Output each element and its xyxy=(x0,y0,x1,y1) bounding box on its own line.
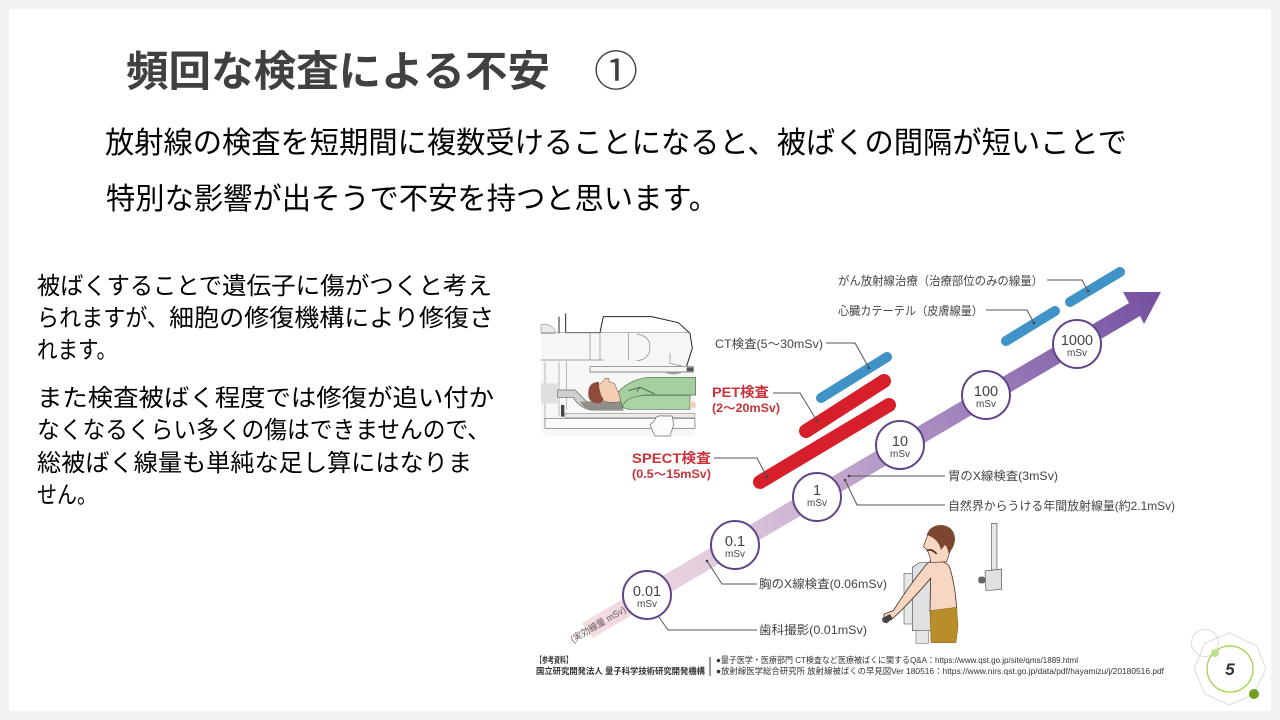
dose marker labels: 10 xyxy=(892,434,908,450)
body text block: また検査被ばく程度では修復が追い付か xyxy=(37,385,494,412)
body text block: れます。 xyxy=(37,337,117,364)
exam labels xyxy=(715,273,1175,637)
body text block: 被ばくすることで xyxy=(37,273,222,300)
dose marker labels: mSv xyxy=(1067,348,1087,359)
reference divider xyxy=(709,657,711,676)
exam labels: CT検査(5〜30mSv) xyxy=(715,337,823,351)
bar: cardiac catheter xyxy=(1006,311,1055,341)
axis label: (実効線量 mSv) xyxy=(568,604,628,646)
red exam labels xyxy=(632,384,780,481)
body text block: なくなるくらい多くの傷はできませんので、 xyxy=(37,417,490,444)
red exam labels: (2〜20mSv) xyxy=(712,403,780,415)
dose bars xyxy=(760,272,1120,482)
dose marker labels xyxy=(633,333,1093,610)
title: 頻回な検査による不安 xyxy=(126,48,550,95)
bar: cancer radiotherapy xyxy=(1070,272,1120,302)
intro text: 特別な影響が出そうで不安を持つと思います。 xyxy=(106,183,718,216)
red exam labels: (0.5〜15mSv) xyxy=(632,469,711,481)
intro text: 放射線の検査を短期間に複数受けることになると、被ばくの間隔が短いことで xyxy=(105,127,1127,160)
exam labels: 胃のX線検査(3mSv) xyxy=(948,468,1058,483)
bar: SPECT xyxy=(760,405,889,482)
reference 1: ●量子医学・医療部門 CT検査など医療被ばくに関するQ&A：https://www.qst.go.jp/site/qms/1889.html xyxy=(716,655,1078,665)
reference 2: ●放射線医学総合研究所 放射線被ばくの早見図Ver 180516：https://www.nirs.qst.go.jp/data/pdf/hayamizu/j/20180516.pdf xyxy=(716,666,1165,676)
exam labels: がん放射線治療（治療部位のみの線量） xyxy=(838,273,1043,288)
dose marker labels: 1 xyxy=(813,483,821,499)
leader lines xyxy=(659,280,1088,630)
exam labels: 胸のX線検査(0.06mSv) xyxy=(759,576,887,591)
exam labels: 自然界からうける年間放射線量(約2.1mSv) xyxy=(948,498,1175,513)
dose marker labels: 1000 xyxy=(1061,333,1093,349)
illustration: man having chest x-ray xyxy=(882,523,1002,643)
red exam labels: SPECT検査 xyxy=(632,450,711,466)
references xyxy=(536,655,1165,676)
body text block xyxy=(37,273,494,509)
dose marker labels: mSv xyxy=(637,599,657,610)
references heading: 【参考資料】 xyxy=(536,655,572,665)
dose markers xyxy=(623,320,1101,619)
leader dots xyxy=(706,290,1089,562)
exam labels: 心臓カテーテル（皮膚線量） xyxy=(838,303,983,318)
dose marker labels: mSv xyxy=(725,549,745,560)
title: ① xyxy=(594,48,638,95)
dose marker labels: mSv xyxy=(976,399,996,410)
dose arrow xyxy=(582,292,1161,638)
dose marker labels: 0.01 xyxy=(633,584,661,600)
page number badge: 5 xyxy=(1225,660,1235,679)
body text block: 細胞の修復機構により修復さ xyxy=(169,305,494,332)
exam labels: 歯科撮影(0.01mSv) xyxy=(759,622,867,637)
body text block: せん。 xyxy=(37,482,97,509)
dose marker labels: mSv xyxy=(890,449,910,460)
dose marker labels: 0.1 xyxy=(725,534,745,550)
references organisation: 国立研究開発法人 量子科学技術研究開発機構 xyxy=(536,666,705,676)
dose marker labels: mSv xyxy=(807,498,827,509)
red exam labels: PET検査 xyxy=(712,384,769,400)
intro text xyxy=(105,127,1127,216)
illustration: patient in scanner xyxy=(541,313,696,436)
bar: CT xyxy=(821,357,887,398)
body text block: 遺伝子に傷がつくと考え xyxy=(222,273,492,300)
dose marker labels: 100 xyxy=(974,384,998,400)
body text block: られますが、 xyxy=(37,305,169,332)
bar: PET xyxy=(806,381,884,431)
body text block: 総被ばく線量も単純な足し算にはなりま xyxy=(37,450,472,477)
page number badge xyxy=(1192,630,1266,705)
